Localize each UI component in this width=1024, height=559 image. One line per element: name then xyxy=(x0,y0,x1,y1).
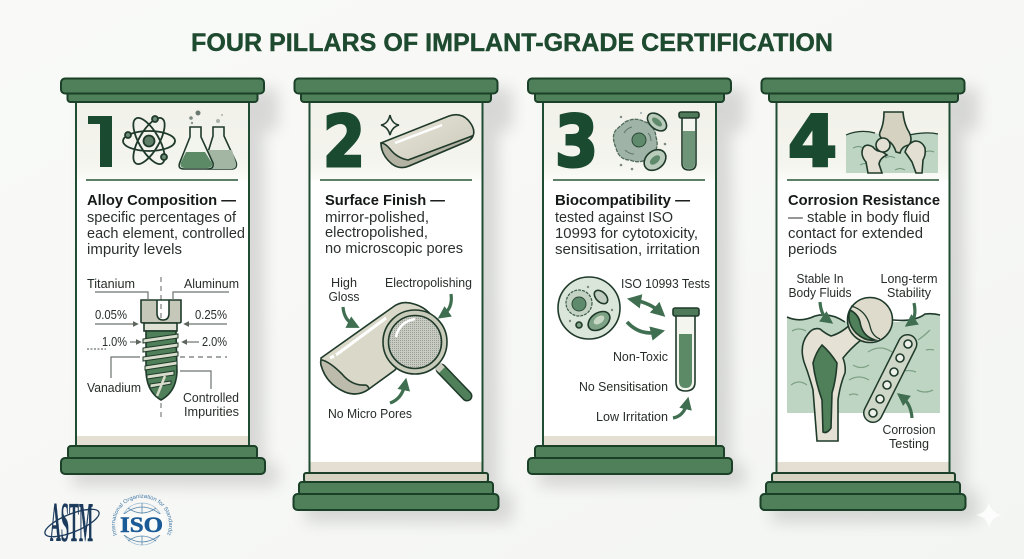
icon: magnifier xyxy=(383,310,467,396)
text: ASTM xyxy=(50,492,93,554)
text block: impurity levels xyxy=(87,242,182,258)
label: high gloss: Gloss xyxy=(328,290,360,304)
label: controlled impurities: Impurities xyxy=(184,405,239,419)
text block xyxy=(325,192,463,257)
label: non-toxic: Non-Toxic xyxy=(613,350,668,364)
text block: no microscopic pores xyxy=(325,241,463,257)
label: 2.0% xyxy=(180,335,227,357)
text block: tested against ISO xyxy=(555,210,673,226)
label: long-term stability xyxy=(880,272,938,323)
icon: cells and test tube xyxy=(613,110,699,175)
panel: pillar 1 alloy composition xyxy=(61,78,278,486)
panel: pillar 4 corrosion resistance xyxy=(760,78,978,522)
logo: ISO xyxy=(112,494,173,546)
divider xyxy=(787,179,939,181)
label: 0.25%: 0.25% xyxy=(195,308,227,322)
icon: sparkle xyxy=(381,115,399,135)
label: no sensitisation: No Sensitisation xyxy=(579,380,668,394)
label: controlled impurities xyxy=(180,371,239,419)
label: high gloss xyxy=(328,276,360,325)
icon: corner sparkle xyxy=(976,502,1002,528)
label: no micro pores xyxy=(328,384,412,421)
text block: mirror-polished, xyxy=(325,210,429,226)
text block: Alloy Composition — xyxy=(87,192,236,209)
text block: 10993 for cytotoxicity, xyxy=(555,226,698,242)
label: low irritation: Low Irritation xyxy=(596,410,668,424)
text block: contact for extended xyxy=(788,226,923,242)
text block: specific percentages of xyxy=(87,210,237,226)
text block xyxy=(788,192,940,258)
text block: each element, controlled xyxy=(87,226,245,242)
logo: ISO: ISO xyxy=(120,512,163,537)
label: no micro pores: No Micro Pores xyxy=(328,407,412,421)
label: high gloss: High xyxy=(331,276,357,290)
label: low irritation xyxy=(596,403,687,424)
divider xyxy=(320,179,472,181)
icon: bone plate xyxy=(869,340,912,417)
number 1: 1 xyxy=(88,102,113,184)
number 3: 3 xyxy=(555,101,598,183)
logo: ISO: International Organization for Standardization xyxy=(112,494,173,536)
number 4: 4 xyxy=(788,101,837,183)
label: controlled impurities: Controlled xyxy=(183,391,239,405)
label: aluminum: Aluminum xyxy=(184,277,239,291)
panel: pillar 3 biocompatibility xyxy=(528,78,745,486)
icon: atom xyxy=(123,113,175,169)
label: corrosion testing xyxy=(882,397,936,451)
label: 0.25% xyxy=(185,308,227,324)
icon: petri dish cell xyxy=(558,277,620,339)
label: iso 10993 tests: ISO 10993 Tests xyxy=(621,277,710,291)
text block: Biocompatibility — xyxy=(555,192,690,209)
label: 1.0%: 1.0% xyxy=(102,335,127,349)
divider xyxy=(86,179,238,181)
text block: Surface Finish — xyxy=(325,192,445,209)
label: corrosion testing: Testing xyxy=(889,437,929,451)
label: vanadium: Vanadium xyxy=(87,381,141,395)
text block: Corrosion Resistance xyxy=(788,192,940,209)
label: long-term stability: Long-term xyxy=(880,272,938,286)
number 2: 2 xyxy=(323,101,365,183)
panel: pillar 2 surface finish xyxy=(294,78,512,522)
diagram: hip implant in body fluid xyxy=(787,272,940,451)
arrow: cell to tube xyxy=(627,322,658,333)
label: corrosion testing: Corrosion xyxy=(882,423,936,437)
label: vanadium xyxy=(87,357,141,395)
text block: sensitisation, irritation xyxy=(555,242,700,258)
label: stable in body fluids xyxy=(788,272,852,320)
label: 0.05%: 0.05% xyxy=(95,308,127,322)
diagram: dental implant xyxy=(87,277,239,420)
label: titanium: Titanium xyxy=(87,277,135,291)
label: 2.0%: 2.0% xyxy=(202,335,227,349)
diagram: cell and test tube xyxy=(558,277,710,424)
label: electropolishing xyxy=(385,276,472,315)
label: stable in body fluids: Body Fluids xyxy=(788,286,852,300)
text block xyxy=(87,192,245,258)
icon: hip joint in fluid xyxy=(846,112,938,173)
title: FOUR PILLARS OF IMPLANT-GRADE CERTIFICATION xyxy=(191,29,833,57)
text block: electropolished, xyxy=(325,225,428,241)
divider xyxy=(553,179,705,181)
label: titanium xyxy=(87,277,148,300)
icon: flasks xyxy=(179,110,236,169)
text block: — stable in body fluid xyxy=(788,210,930,226)
text block: periods xyxy=(788,242,837,258)
icon: femoral ball head xyxy=(848,298,892,342)
label: 1.0% xyxy=(87,335,140,349)
label: electropolishing: Electropolishing xyxy=(385,276,472,290)
diagram: magnifier over rod xyxy=(321,276,472,421)
icon: femur xyxy=(802,322,861,441)
label: long-term stability: Stability xyxy=(887,286,932,300)
label: stable in body fluids: Stable In xyxy=(796,272,844,286)
label: aluminum xyxy=(173,277,239,300)
icon: test tube xyxy=(673,308,699,391)
number 1 xyxy=(88,116,112,167)
arrow: two-way exchange xyxy=(634,300,660,312)
icon: polished rod xyxy=(381,115,474,168)
text block xyxy=(555,192,700,258)
logo: ASTM xyxy=(42,492,102,554)
